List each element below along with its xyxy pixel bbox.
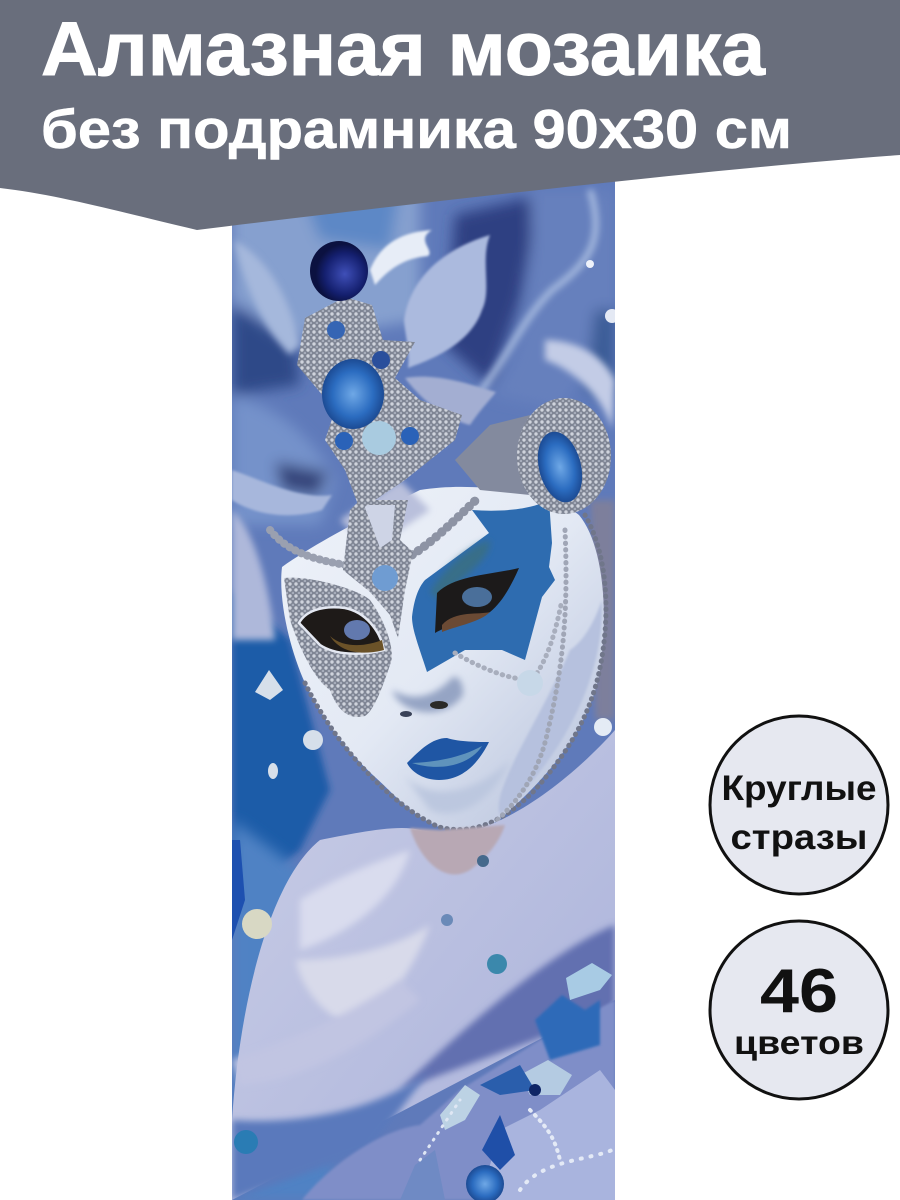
gem: central blue (322, 359, 384, 429)
badge: 46 colours: 46 (760, 957, 838, 1026)
badge: round rhinestones: стразы (730, 818, 868, 857)
lips (407, 738, 489, 780)
gem: teardrop (538, 432, 582, 502)
veil folds (300, 850, 410, 950)
fabric and feathers: headdress (232, 190, 615, 525)
painting: venetian mask (232, 175, 619, 1200)
veil and scarf (232, 730, 615, 1200)
feather: white plume (370, 230, 432, 285)
badge: 46 colours (710, 921, 888, 1099)
badge: 46 colours: цветов (734, 1024, 864, 1061)
badge: round rhinestones (710, 716, 888, 894)
central pendant (343, 500, 413, 638)
jewels bottom right (400, 963, 612, 1200)
left background: deep blue (232, 590, 330, 900)
blue glitter eye panel (412, 500, 555, 672)
badge: round rhinestones: Круглые (722, 769, 876, 808)
droplets and crystals (234, 260, 619, 1154)
subtitle: без подрамника 90х30 см (41, 98, 792, 160)
nose shading (392, 677, 463, 712)
feather: large (404, 235, 490, 368)
right eye (435, 568, 519, 633)
jewelled crown (297, 241, 611, 514)
mask chains (305, 515, 606, 830)
header banner (0, 0, 900, 230)
mask face (270, 480, 606, 830)
left eye ornament (284, 578, 392, 717)
title: Алмазная мозаика (41, 7, 766, 92)
gem: dark sapphire (310, 241, 368, 301)
